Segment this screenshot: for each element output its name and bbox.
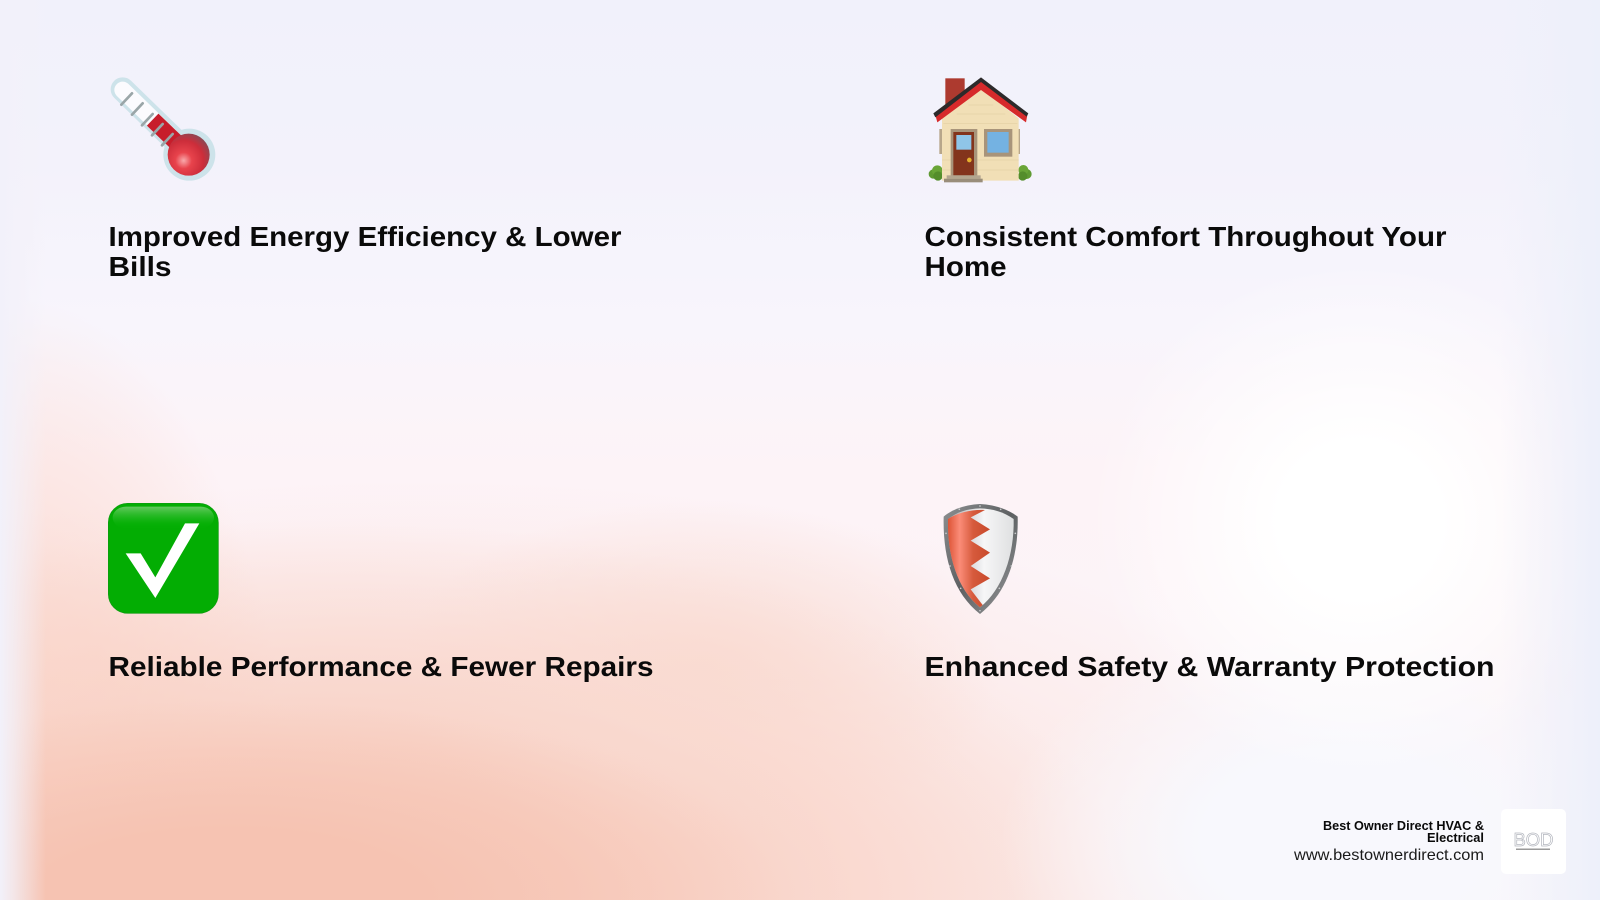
heading: reliable performance: Reliable Performance & Fewer Repairs [108,651,654,682]
heading: energy efficiency: Bills [108,251,172,282]
icon: green check [108,503,219,614]
footer brand block: www.bestownerdirect.com [1293,847,1484,864]
footer brand block [1293,818,1484,864]
heading: consistent comfort [924,221,1447,282]
heading: consistent comfort: Consistent Comfort Throughout Your [924,221,1447,252]
heading: energy efficiency [108,221,622,282]
logo tile [1501,809,1566,874]
footer brand block: Best Owner Direct HVAC & [1323,818,1484,833]
icon: thermometer [110,78,216,181]
heading: energy efficiency: Improved Energy Efficiency & Lower [108,221,622,252]
icon: house [928,77,1032,182]
icon: shield [944,504,1018,614]
heading: enhanced safety: Enhanced Safety & Warranty Protection [924,651,1494,682]
heading: consistent comfort: Home [924,251,1006,282]
logo tile: BOD [1514,830,1554,850]
footer brand block: Electrical [1427,830,1484,845]
